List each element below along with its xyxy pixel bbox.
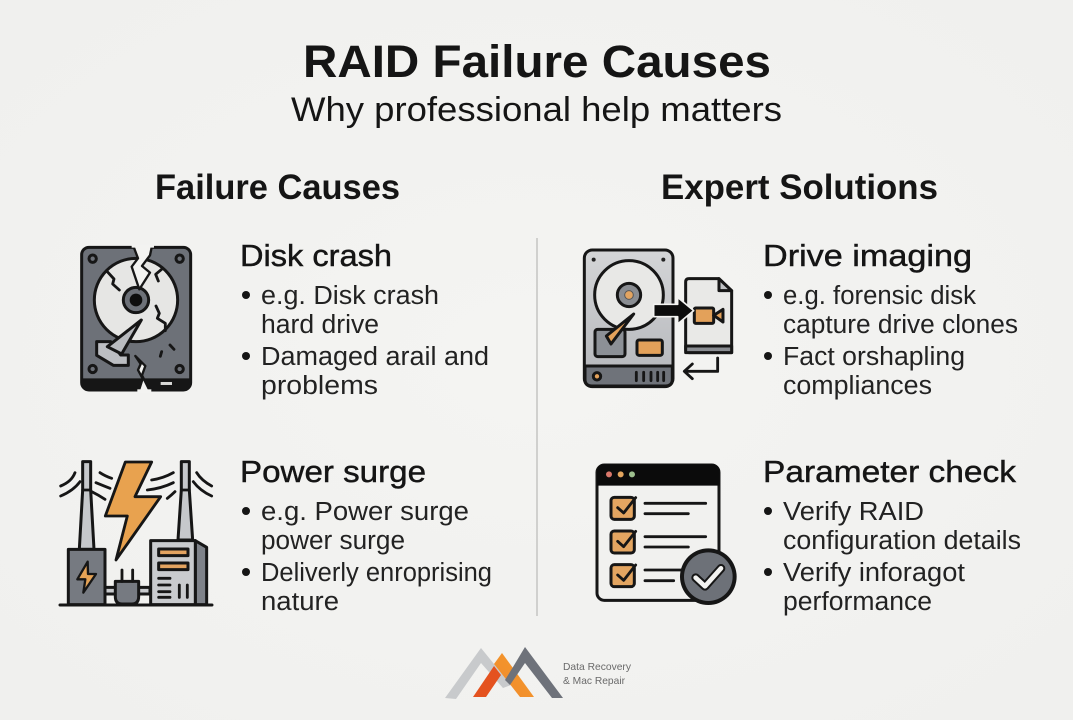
- text block: disk crash: hard drive: [261, 311, 379, 339]
- text block: drive imaging: Drive imaging: [763, 238, 972, 273]
- text block: power surge: Deliverly enroprising: [261, 559, 492, 587]
- logo: & Mac Repair: [563, 675, 625, 687]
- title: RAID Failure Causes: [303, 36, 771, 87]
- text block: power surge: power surge: [261, 527, 405, 555]
- text block: disk crash: [240, 238, 489, 400]
- logo: Data Recovery: [563, 661, 632, 673]
- subtitle: Why professional help matters: [291, 91, 782, 129]
- text block: drive imaging: e.g. forensic disk: [783, 282, 976, 310]
- icon: power surge: [60, 462, 212, 605]
- logo: [445, 647, 632, 699]
- text block: parameter check: Parameter check: [763, 454, 1017, 489]
- text block: disk crash: e.g. Disk crash: [261, 282, 439, 310]
- icon: parameter checklist: [597, 464, 737, 605]
- text block: drive imaging: compliances: [783, 372, 932, 400]
- text block: drive imaging: Fact orshapling: [783, 343, 965, 371]
- text block: parameter check: Verify inforagot: [783, 559, 965, 587]
- text block: power surge: [240, 454, 492, 616]
- text block: disk crash: Disk crash: [240, 238, 392, 273]
- heading: expert solutions: Expert Solutions: [661, 168, 938, 207]
- text block: parameter check: performance: [783, 588, 932, 616]
- text block: parameter check: configuration details: [783, 527, 1021, 555]
- text block: disk crash: Damaged arail and: [261, 343, 489, 371]
- icon: drive imaging: [584, 250, 732, 387]
- text block: power surge: nature: [261, 588, 339, 616]
- text block: drive imaging: [763, 238, 1018, 400]
- text block: drive imaging: capture drive clones: [783, 311, 1018, 339]
- text block: disk crash: problems: [261, 372, 378, 400]
- text block: parameter check: [763, 454, 1021, 616]
- heading: failure causes: Failure Causes: [155, 168, 400, 207]
- text block: power surge: Power surge: [240, 454, 426, 489]
- text block: parameter check: Verify RAID: [783, 498, 924, 526]
- icon: cracked hard drive: [82, 244, 191, 393]
- text block: power surge: e.g. Power surge: [261, 498, 469, 526]
